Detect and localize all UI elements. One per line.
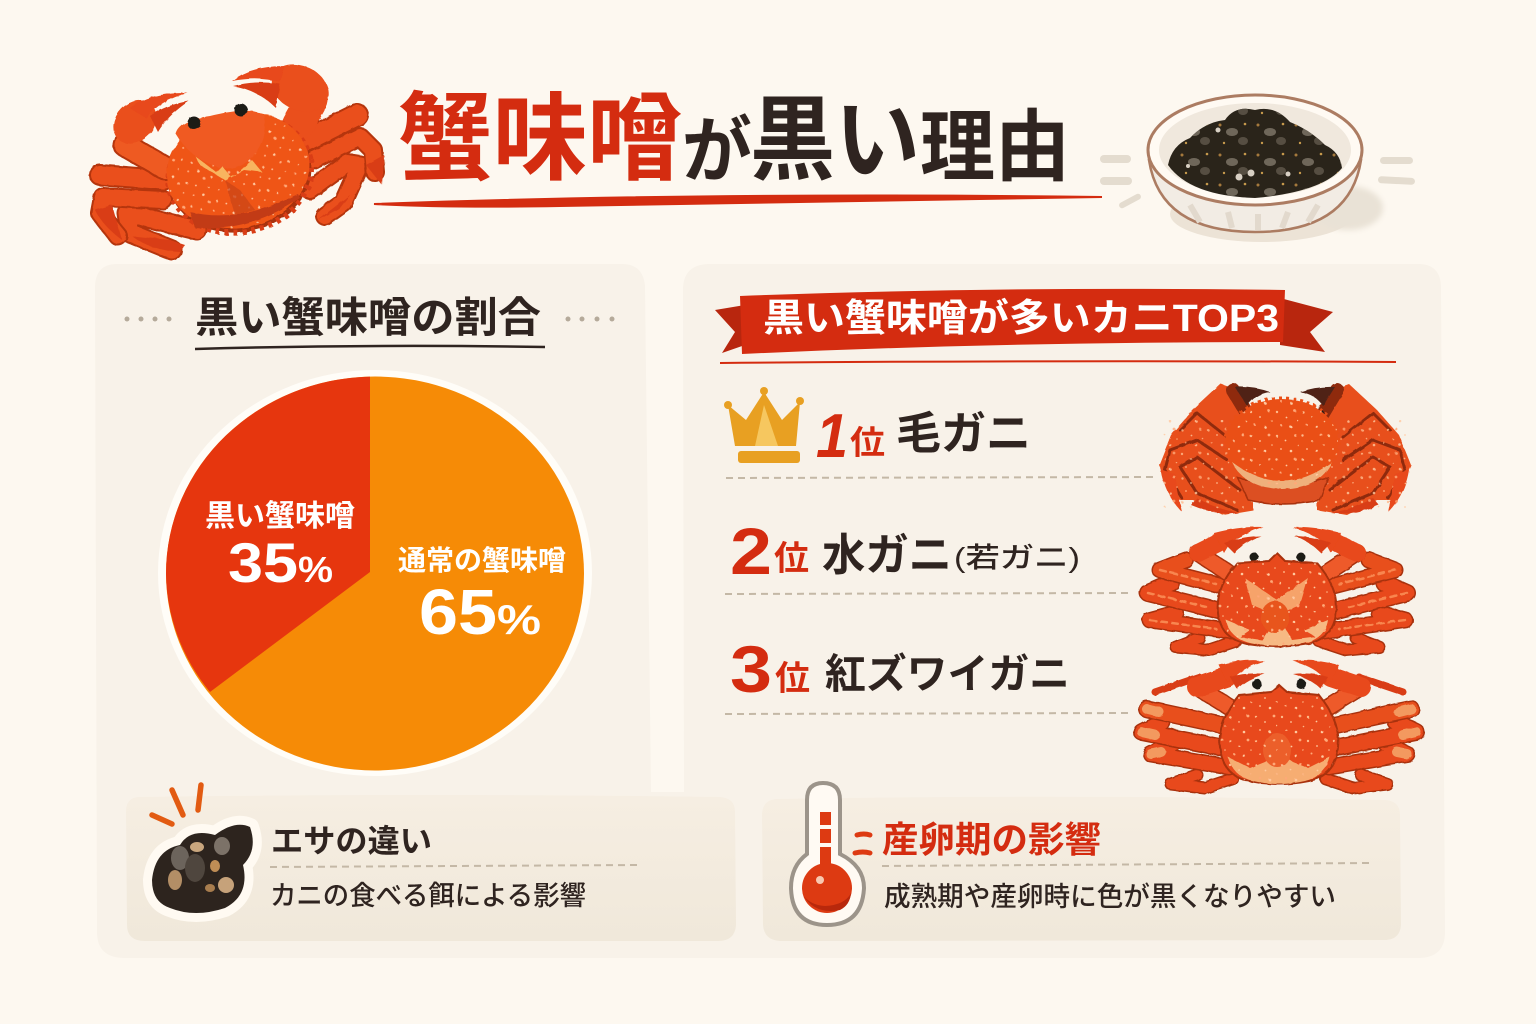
- rank 3: [730, 632, 1070, 706]
- label: black miso share: [205, 500, 355, 594]
- rank 2: 2: [730, 514, 772, 588]
- card body: カニの食べる餌による影響: [270, 881, 586, 911]
- card body: 成熟期や産卵時に色が黒くなりやすい: [884, 882, 1336, 912]
- title: 黒い: [750, 90, 920, 192]
- title: 蟹味噌: [398, 86, 682, 193]
- heading: ratio: [124, 294, 614, 349]
- label: black miso share: 黒い蟹味噌: [205, 500, 355, 533]
- label: black miso share: %: [298, 549, 333, 590]
- crab: snow crab: [1148, 527, 1407, 650]
- rank 2: (若ガニ): [954, 542, 1080, 573]
- rank 2: 位: [774, 540, 809, 578]
- rank 2: 水ガニ: [822, 531, 952, 580]
- label: normal miso share: %: [497, 596, 541, 643]
- label: normal miso share: 65: [419, 576, 497, 648]
- pie chart: [158, 370, 592, 776]
- crab: hairy crab: [1159, 384, 1411, 515]
- header crab illustration: [95, 55, 384, 252]
- ribbon heading: [715, 289, 1396, 363]
- card heading: エサの違い: [271, 823, 432, 859]
- title underline brush: [374, 196, 1102, 207]
- card: feed difference: [126, 785, 736, 941]
- panel background: [95, 264, 1445, 958]
- panel: black miso ratio: [124, 294, 614, 776]
- label: normal miso share: 通常の蟹味噌: [398, 545, 566, 576]
- rank 3: 位: [775, 660, 810, 698]
- ribbon heading: 黒い蟹味噌が多いカニTOP3: [763, 298, 1279, 340]
- label: normal miso share: [398, 545, 566, 648]
- label: black miso share: 35: [228, 531, 298, 594]
- icon: thermometer: [791, 783, 864, 925]
- icon: tick marks: [855, 834, 870, 853]
- rank 3: 3: [730, 632, 772, 706]
- heading: ratio: 黒い蟹味噌の割合: [195, 294, 541, 341]
- icon: crown: [724, 387, 804, 463]
- crab: red snow crab: [1142, 660, 1416, 788]
- icon: bowl of black crab miso: [1148, 95, 1383, 242]
- title: [398, 86, 1070, 193]
- rank 1: 1: [816, 402, 848, 471]
- rank 1: 位: [850, 424, 885, 461]
- rank 3: 紅ズワイガニ: [825, 651, 1070, 697]
- title: 理由: [920, 103, 1070, 191]
- card heading: 産卵期の影響: [882, 819, 1101, 860]
- card: spawning effect: [762, 783, 1401, 941]
- panel: top 3 crabs: [715, 289, 1416, 788]
- icon: dark lump with rays: [152, 785, 253, 913]
- rank 2: [730, 514, 1080, 588]
- rank 1: [724, 387, 1031, 471]
- icon: steam dashes: [1100, 155, 1415, 209]
- title: が: [682, 112, 752, 192]
- rank 1: 毛ガニ: [896, 408, 1031, 459]
